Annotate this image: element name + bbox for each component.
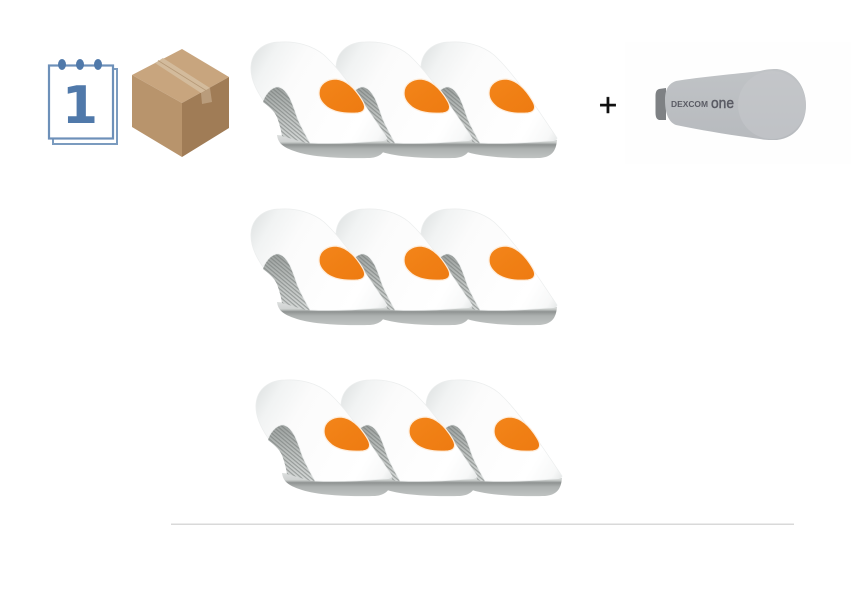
sensor: dexcom one: one xyxy=(711,95,734,112)
device 3-1 xyxy=(256,380,392,496)
icon: calendar showing day 1: 1 xyxy=(62,76,98,136)
device 2-3 xyxy=(421,209,557,325)
device row 2 xyxy=(251,209,557,325)
icon: calendar showing day 1 xyxy=(49,59,117,144)
sensor: dexcom one: DEXCOM xyxy=(671,100,708,109)
device 1-3 xyxy=(421,42,557,158)
device 3-3 xyxy=(426,380,562,496)
device 2-2 xyxy=(336,209,472,325)
device 2-1 xyxy=(251,209,387,325)
sensor: dexcom one xyxy=(656,69,806,140)
device 1-2 xyxy=(336,42,472,158)
device row 3 xyxy=(256,380,562,496)
icon: cardboard box xyxy=(132,49,229,157)
plus sign: + xyxy=(599,87,617,123)
device row 1 xyxy=(251,42,557,158)
device 3-2 xyxy=(341,380,477,496)
device 1-1 xyxy=(251,42,387,158)
